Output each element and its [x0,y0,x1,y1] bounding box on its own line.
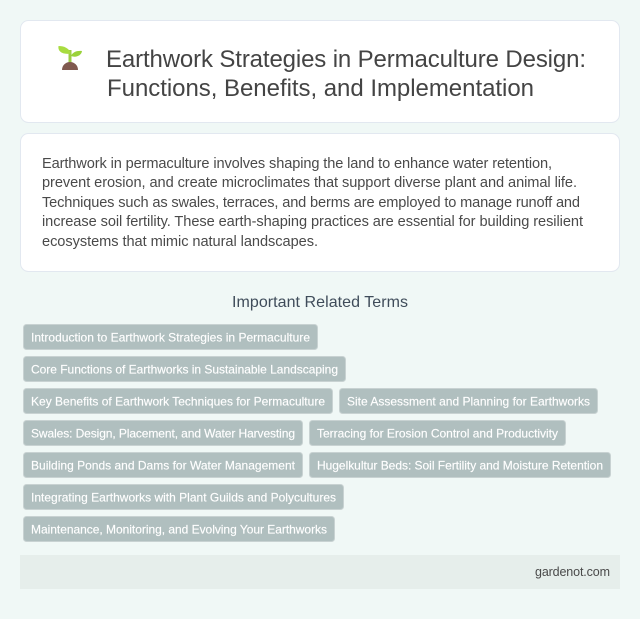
tag: introduction [24,324,318,350]
text block: introduction: increase soil fertility. These earth-shaping practices are essential for building resilient [42,214,583,230]
tag: maintenance [24,516,334,542]
panel: introduction text card [20,134,620,272]
footer bar [20,555,620,589]
tag: site assessment: Site Assessment and Planning for Earthworks [347,394,590,408]
text block: introduction: Techniques such as swales, terraces, and berms are employed to manage runoff and [42,195,580,211]
text block: introduction: Earthwork in permaculture involves shaping the land to enhance water retention, [42,156,552,172]
tag: terracing [310,420,566,446]
tag: terracing: Terracing for Erosion Control and Productivity [317,426,558,440]
title: Earthwork Strategies in Permaculture Design: [106,46,586,73]
tag: hugelkultur: Hugelkultur Beds: Soil Fertility and Moisture Retention [317,458,603,472]
tag: key benefits: Key Benefits of Earthwork Techniques for Permaculture [31,394,325,408]
title [106,46,586,102]
text block: introduction [42,156,583,250]
tag: key benefits [24,388,332,414]
icon: seedling [58,46,82,70]
footer bar: gardenot.com [535,565,610,579]
tag: plant guilds: Integrating Earthworks with Plant Guilds and Polycultures [31,490,336,504]
tag: core functions [24,356,346,382]
text block: introduction: ecosystems that mimic natural landscapes. [42,234,318,250]
tag: swales [24,420,302,446]
panel: header card [20,20,620,122]
heading: important related terms: Important Related Terms [232,294,408,311]
tag: plant guilds [24,484,344,510]
title: Functions, Benefits, and Implementation [107,75,534,102]
tag: ponds and dams [24,452,302,478]
tag: ponds and dams: Building Ponds and Dams for Water Management [31,458,296,472]
tag: maintenance: Maintenance, Monitoring, and Evolving Your Earthworks [31,522,327,536]
tag: hugelkultur [310,452,610,478]
tag: swales: Swales: Design, Placement, and Water Harvesting [31,426,295,440]
tag: introduction: Introduction to Earthwork Strategies in Permaculture [31,330,310,344]
text block: introduction: prevent erosion, and create microclimates that support diverse plant and animal life. [42,175,577,191]
tag: site assessment [340,388,598,414]
tag: core functions: Core Functions of Earthworks in Sustainable Landscaping [31,362,338,376]
